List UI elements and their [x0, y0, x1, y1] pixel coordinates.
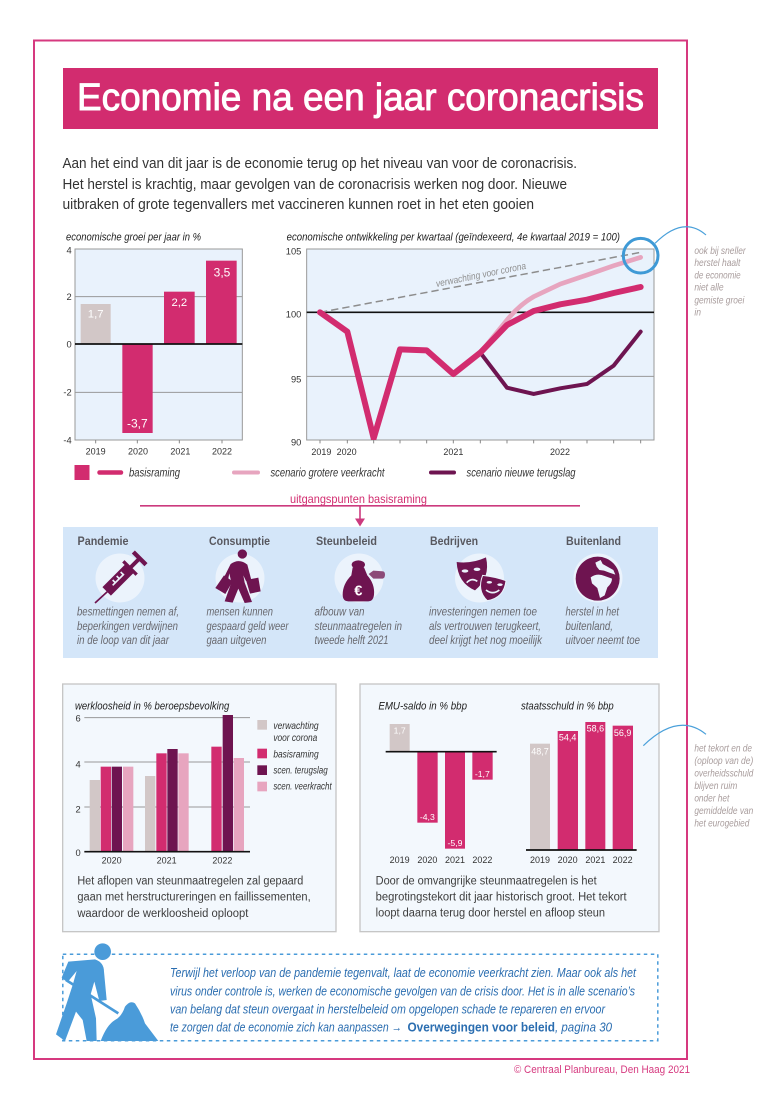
- chart: staatsschuld: 58,6: [587, 724, 604, 734]
- y axis labels: -2: [63, 388, 72, 398]
- side note: tekort: overheidsschuld: [694, 769, 754, 780]
- text: werkloosheid: Het aflopen van steunmaatregelen zal gepaard: [77, 873, 303, 887]
- column: Steunbeleid: Steunbeleid: [316, 534, 377, 548]
- y axis labels: 105: [286, 246, 301, 256]
- column: Bedrijven: Bedrijven: [430, 534, 478, 548]
- text: EMU-saldo: [376, 873, 627, 920]
- icon: theatre masks: [457, 557, 506, 601]
- legend: werkloosheid: verwachting: [273, 721, 319, 732]
- column: Steunbeleid: afbouw van: [314, 604, 365, 618]
- side note: groei: gemiste groei: [694, 295, 745, 306]
- bars 2021: [145, 749, 189, 852]
- legend: werkloosheid: basisraming: [273, 749, 319, 760]
- legend: werkloosheid: scen. terugslag: [273, 765, 328, 776]
- bar 2019: 1,7: [88, 309, 104, 321]
- icon: worker with shovel: [56, 943, 158, 1041]
- legend: werkloosheid: voor corona: [273, 733, 318, 744]
- arrow: uitgangspunten: [140, 506, 580, 526]
- y axis labels: [63, 245, 72, 446]
- chart: EMU-saldo: 2020: [417, 855, 437, 865]
- side note: tekort: gemiddelde van: [694, 806, 754, 817]
- x axis labels: 2020: [102, 855, 122, 865]
- side note: groei: [694, 246, 746, 319]
- y axis labels: [75, 713, 81, 858]
- chart: staatsschuld: 2021: [585, 855, 605, 865]
- line: scenario nieuwe terugslag: [480, 332, 641, 394]
- x axis labels: 2022: [212, 446, 232, 456]
- chart: staatsschuld: 2019: [530, 855, 550, 865]
- x axis labels: 2019: [311, 447, 331, 457]
- column: Consumptie: Consumptie: [209, 534, 270, 548]
- text: callout: , pagina 30: [555, 1020, 612, 1034]
- chart: EMU-saldo: -4,3: [420, 812, 435, 822]
- line: verwachting voor corona: verwachting voor corona: [435, 261, 528, 290]
- legend: basisraming: [129, 468, 180, 480]
- chart: EMU-saldo: [378, 700, 497, 865]
- line: verwachting voor corona: [320, 252, 641, 312]
- chart: staatsschuld: 56,9: [614, 728, 631, 738]
- side note: tekort: onder het: [694, 793, 730, 804]
- side note: groei: herstel haalt: [694, 258, 741, 269]
- chart: EMU-saldo: -5,9: [448, 838, 463, 848]
- y axis labels: 90: [291, 437, 301, 447]
- chart: staatsschuld: [521, 700, 637, 865]
- bar 2021: [164, 292, 195, 344]
- legend: scenario grotere veerkracht: [270, 468, 385, 480]
- x axis labels: 2021: [157, 855, 177, 865]
- y axis labels: 2: [75, 804, 81, 814]
- bar 2022: [206, 261, 237, 344]
- column: Pandemie: [77, 534, 179, 647]
- text: callout: Overwegingen voor beleid: [408, 1020, 555, 1034]
- y axis labels: 2: [66, 292, 72, 302]
- text: callout: Terwijl het verloop van de pandemie tegenvalt, laat de economie veerkracht zien. Maar ook als het: [170, 966, 636, 980]
- column: Bedrijven: [429, 534, 543, 647]
- x axis labels: 2020: [128, 446, 148, 456]
- bar 2020: -3,7: [127, 417, 148, 431]
- callout box: [56, 943, 658, 1041]
- chart: EMU-saldo: 2019: [390, 855, 410, 865]
- side note: tekort: (oploop van de): [694, 756, 753, 767]
- icon: globe: [576, 557, 620, 601]
- column: Bedrijven: als vertrouwen terugkeert,: [429, 619, 541, 633]
- y axis labels: 95: [291, 375, 301, 385]
- chart: staatsschuld: 2022: [613, 855, 633, 865]
- side note: groei: in: [694, 308, 701, 319]
- bars 2020: [90, 767, 133, 852]
- highlight circle: [623, 238, 658, 273]
- pointer curve: [643, 725, 706, 746]
- title banner: Economie na een jaar coronacrisis: [77, 77, 644, 119]
- pointer curve: [655, 227, 706, 243]
- column: Pandemie: in de loop van dit jaar: [77, 633, 170, 647]
- column: Consumptie: gaan uitgeven: [206, 633, 267, 647]
- intro text: Aan het eind van dit jaar is de economie terug op het niveau van voor de coronacrisis.: [62, 156, 577, 172]
- column: Consumptie: [206, 534, 289, 647]
- intro text: Het herstel is krachtig, maar gevolgen van de coronacrisis werken nog door. Nieuwe: [62, 177, 567, 193]
- panel: EMU-saldo en staatsschuld: [360, 684, 754, 932]
- y axis labels: -4: [63, 436, 72, 446]
- chart: EMU-saldo: 2022: [472, 855, 492, 865]
- x axis labels: [311, 447, 570, 457]
- side note: tekort: het tekort en de: [694, 744, 752, 755]
- chart: staatsschuld: 54,4: [559, 733, 576, 743]
- x axis labels: 2022: [212, 855, 232, 865]
- column: Consumptie: mensen kunnen: [206, 604, 273, 618]
- y axis labels: 4: [66, 245, 72, 255]
- column: Buitenland: buitenland,: [566, 619, 613, 633]
- text: EMU-saldo: begrotingstekort dit jaar historisch groot. Het tekort: [376, 890, 627, 904]
- side note: tekort: het eurogebied: [694, 818, 750, 829]
- x axis labels: 2021: [170, 446, 190, 456]
- y axis labels: 6: [75, 713, 81, 723]
- chart: staatsschuld: 2020: [558, 855, 578, 865]
- intro text: uitbraken of grote tegenvallers met vaccineren kunnen roet in het eten gooien: [62, 197, 534, 213]
- text: callout: van belang dat steun overgaat in herstelbeleid om opgelopen schade te repareren en ervoor: [170, 1002, 606, 1016]
- y axis labels: 100: [286, 309, 301, 319]
- x axis labels: 2022: [550, 447, 570, 457]
- y axis labels: 0: [66, 340, 72, 350]
- panel: werkloosheid: [63, 684, 336, 932]
- column: Pandemie: beperkingen verdwijnen: [77, 619, 178, 633]
- column: Pandemie: besmettingen nemen af,: [77, 604, 179, 618]
- side note: groei: de economie: [694, 270, 741, 281]
- x axis labels: 2020: [337, 447, 357, 457]
- side note: tekort: blijven ruim: [694, 781, 738, 792]
- outer frame: [34, 40, 687, 1059]
- bar 2021: 2,2: [171, 297, 187, 309]
- column: Buitenland: [566, 534, 640, 647]
- x axis labels: 2019: [86, 446, 106, 456]
- icon: money bag: €: [354, 583, 362, 599]
- legend: scenario nieuwe terugslag: [466, 468, 576, 480]
- chart: staatsschuld: staatsschuld in % bbp: [521, 700, 614, 712]
- column: Bedrijven: deel krijgt het nog moeilijk: [429, 633, 543, 647]
- chart title: kwartaal: economische ontwikkeling per kwartaal (geïndexeerd, 4e kwartaal 2019 = 100): [287, 232, 620, 244]
- legend: [74, 465, 576, 480]
- text: werkloosheid: waardoor de werkloosheid oploopt: [76, 906, 249, 920]
- text: werkloosheid: gaan met herstructureringen en faillissementen,: [77, 890, 311, 904]
- line: scenario grotere veerkracht: [480, 257, 641, 353]
- panel: uitgangspunten: [63, 527, 658, 658]
- chart: EMU-saldo: 2021: [445, 855, 465, 865]
- chart title: werkloosheid: werkloosheid in % beroepsbevolking: [75, 700, 230, 712]
- legend: werkloosheid: [257, 720, 333, 792]
- copyright: © Centraal Planbureau, Den Haag 2021: [514, 1064, 690, 1076]
- bar 2022: 3,5: [214, 265, 231, 279]
- chart: EMU-saldo: 1,7: [394, 726, 406, 736]
- chart: EMU-saldo: EMU-saldo in % bbp: [378, 700, 467, 712]
- y axis labels: 0: [75, 848, 81, 858]
- x axis labels: [86, 446, 232, 456]
- column: Buitenland: Buitenland: [566, 534, 621, 548]
- column: Steunbeleid: [314, 534, 402, 647]
- x axis labels: 2021: [443, 447, 463, 457]
- text: callout: [170, 966, 636, 1034]
- legend: werkloosheid: scen. veerkracht: [273, 781, 333, 792]
- heading: uitgangspunten basisraming: uitgangspunten basisraming: [290, 492, 427, 506]
- chart: economische ontwikkeling per kwartaal: [286, 227, 746, 457]
- side note: groei: niet alle: [694, 283, 724, 294]
- column: Bedrijven: investeringen nemen toe: [429, 604, 537, 618]
- side note: groei: ook bij sneller: [694, 246, 746, 257]
- side note: tekort: [694, 744, 754, 829]
- text: werkloosheid: [76, 873, 311, 920]
- intro text: [62, 156, 577, 213]
- column: Buitenland: herstel in het: [566, 604, 620, 618]
- column: Buitenland: uitvoer neemt toe: [566, 633, 640, 647]
- bar 2020: [122, 344, 153, 433]
- column: Steunbeleid: tweede helft 2021: [314, 633, 388, 647]
- text: callout: te zorgen dat de economie zich kan aanpassen →: [170, 1020, 402, 1034]
- y axis labels: 4: [75, 759, 81, 769]
- text: EMU-saldo: loopt daarna terug door herstel en afloop steun: [376, 906, 605, 920]
- chart: staatsschuld: 48,7: [531, 746, 549, 756]
- x axis labels: [102, 855, 232, 865]
- column: Pandemie: Pandemie: [78, 534, 129, 548]
- text: callout: virus onder controle is, werken de economische gevolgen van de crisis door. Het is in alle scenario’s: [170, 984, 635, 998]
- column: Consumptie: gespaard geld weer: [206, 619, 289, 633]
- text: EMU-saldo: Door de omvangrijke steunmaatregelen is het: [376, 873, 597, 887]
- line: basisraming: [320, 287, 641, 438]
- bars 2022: [211, 715, 244, 852]
- chart title: groei: economische groei per jaar in %: [66, 232, 201, 244]
- title banner: [63, 68, 658, 129]
- y axis labels: [286, 246, 301, 447]
- chart: economische groei per jaar: [63, 232, 242, 456]
- icon: shopper: [215, 549, 261, 603]
- chart: EMU-saldo: -1,7: [475, 769, 490, 779]
- column: Steunbeleid: steunmaatregelen in: [314, 619, 402, 633]
- icon: syringe: [95, 552, 146, 603]
- bar 2019: [81, 304, 111, 344]
